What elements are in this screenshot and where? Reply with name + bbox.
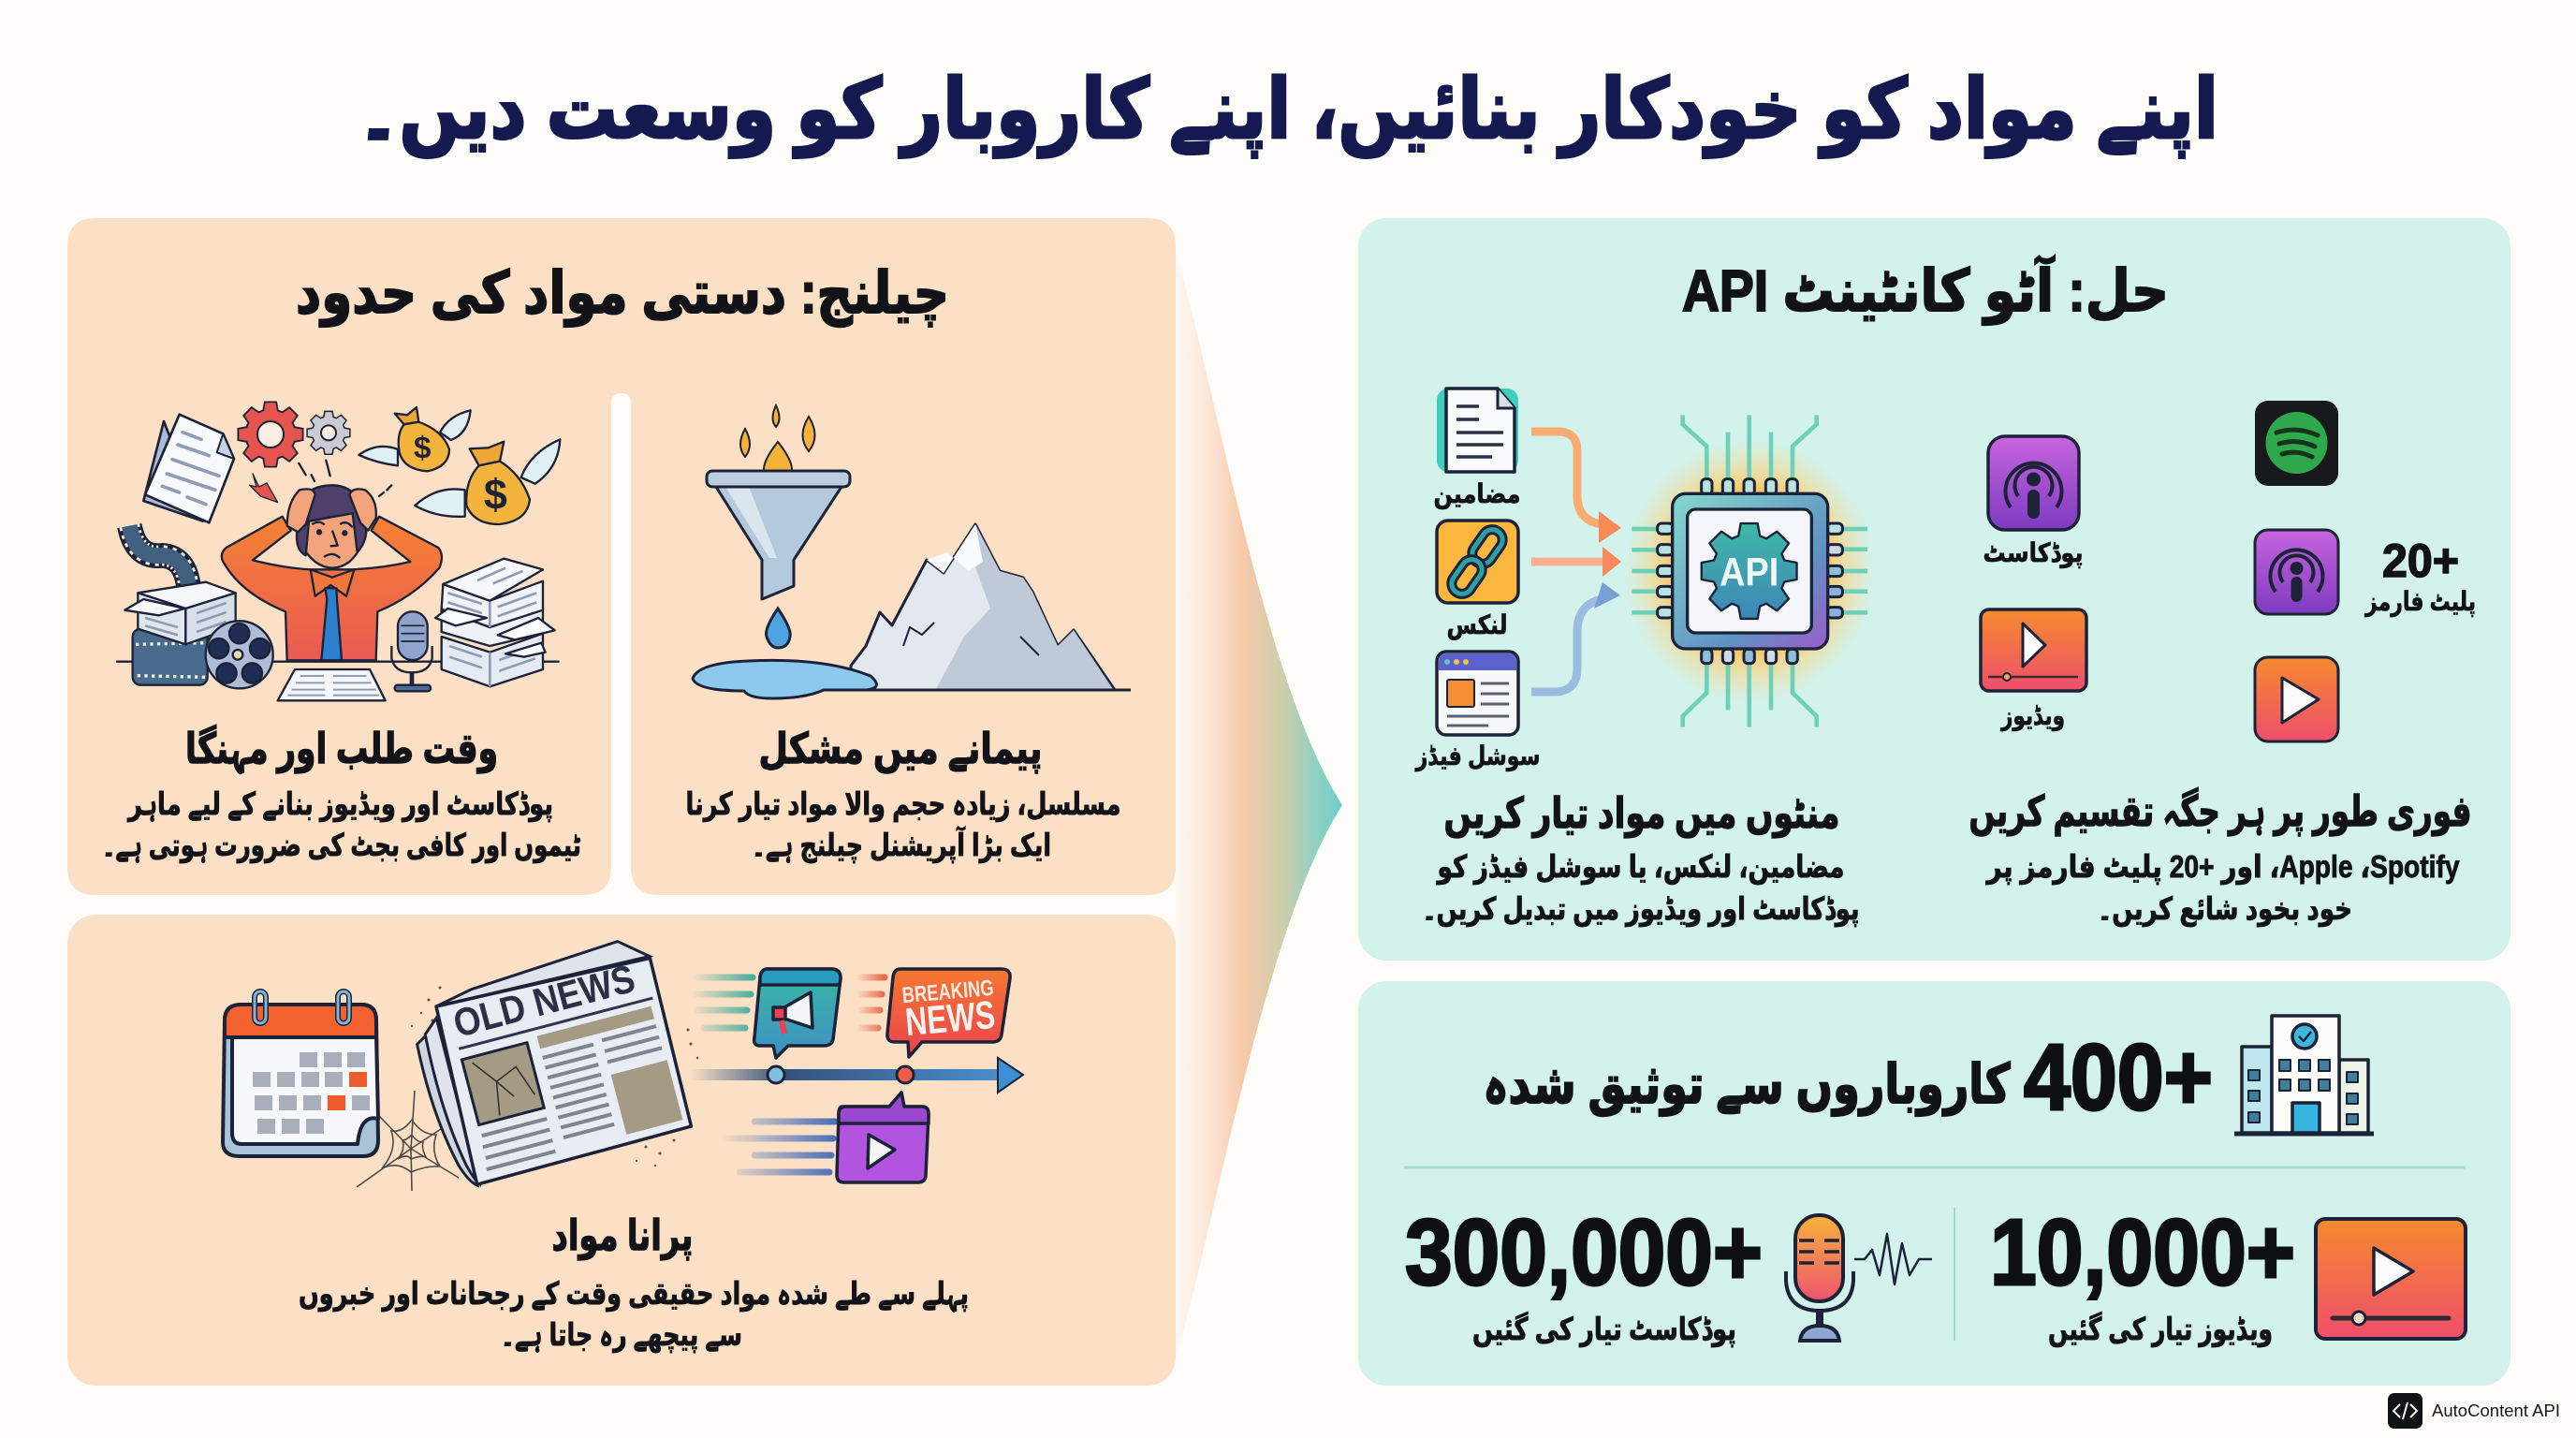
man bbox=[222, 485, 442, 660]
body text: distribute bbox=[1985, 849, 2460, 928]
arrow: transition from challenge to solution bbox=[1176, 253, 1342, 1357]
stat: 20+ platforms: 20+ bbox=[2382, 535, 2459, 587]
icon: apple podcasts bbox=[2255, 530, 2338, 614]
money bags bbox=[359, 407, 560, 524]
cobweb bbox=[357, 1091, 459, 1191]
film reel bbox=[206, 621, 273, 688]
title: اپنے مواد کو خودکار بنائیں، اپنے کاروبار کو وسعت دیں۔ bbox=[358, 63, 2218, 158]
panel: proof stats bbox=[1358, 981, 2510, 1386]
illustration: funnel and mountain bbox=[693, 405, 1131, 698]
stat: 300,000+ podcasts: 300,000+ bbox=[1405, 1200, 1763, 1305]
section: time-consuming and costly bbox=[102, 725, 581, 864]
film and paper stack bbox=[124, 526, 236, 685]
icon: video bbox=[1981, 609, 2086, 691]
gear bbox=[1702, 523, 1797, 619]
icon: spotify bbox=[2255, 401, 2338, 486]
chip API label: API bbox=[1720, 550, 1778, 594]
icon: link bbox=[1437, 521, 1518, 603]
funnel bbox=[707, 471, 850, 599]
ground line bbox=[866, 689, 1131, 691]
label: articles: مضامین bbox=[1434, 479, 1520, 509]
body text: create: مضامین، لنکس، یا سوشل فیڈز کو bbox=[1436, 849, 1844, 886]
panel: solution bbox=[1358, 218, 2510, 961]
illustration: old newspaper bbox=[404, 934, 695, 1191]
subheading: outdated content: پرانا مواد bbox=[552, 1211, 693, 1260]
stat: 10,000+ videos bbox=[1990, 1200, 2295, 1348]
icon: calendar bbox=[223, 991, 378, 1156]
illustration: stressed man at desk bbox=[117, 402, 560, 700]
right paper stack bbox=[435, 559, 555, 686]
label: links: لنکس bbox=[1447, 610, 1507, 640]
body text: outdated content bbox=[299, 1276, 969, 1354]
body text: hard to scale: ایک بڑا آپریشنل چیلنج ہے۔ bbox=[752, 826, 1051, 864]
panel: challenge bbox=[67, 218, 1176, 895]
dollar signs: $ bbox=[414, 431, 432, 465]
body text bbox=[102, 786, 581, 864]
drops bbox=[740, 405, 814, 471]
arrows: inputs to chip bbox=[1531, 432, 1621, 692]
icon: article bbox=[1437, 389, 1518, 472]
breaking news text: NEWS bbox=[903, 992, 997, 1044]
gears bbox=[238, 402, 391, 503]
logo: AutoContent API: AutoContent API bbox=[2432, 1401, 2560, 1420]
label: social feeds: سوشل فیڈز bbox=[1414, 741, 1541, 771]
dust specks bbox=[411, 987, 698, 1167]
label: podcasts: پوڈکاسٹ bbox=[1983, 538, 2084, 568]
icon: breaking news bubble bbox=[887, 969, 1010, 1057]
mountain bbox=[851, 524, 1115, 690]
body text: create: پوڈکاسٹ اور ویڈیوز میں تبدیل کریں۔ bbox=[1423, 891, 1859, 928]
subheading: create content in minutes: منٹوں میں مواد تیار کریں bbox=[1443, 789, 1840, 838]
icon: video bubble bbox=[837, 1093, 929, 1182]
body text: create bbox=[1423, 849, 1859, 928]
icon: podcast bbox=[1988, 436, 2079, 530]
puddle bbox=[693, 660, 876, 698]
body text: پوڈکاسٹ اور ویڈیوز بنانے کے لیے ماہر bbox=[126, 786, 553, 823]
heading: challenge: چیلنج: دستی مواد کی حدود bbox=[296, 261, 949, 327]
stat: 10,000+ videos: 10,000+ bbox=[1990, 1200, 2295, 1305]
body text: ٹیموں اور کافی بجٹ کی ضرورت ہوتی ہے۔ bbox=[102, 828, 581, 864]
desk document bbox=[278, 669, 386, 700]
dollar signs bbox=[414, 431, 507, 518]
document bbox=[143, 415, 234, 522]
label: videos: ویڈیوز bbox=[1999, 701, 2065, 731]
icon: social feeds bbox=[1437, 652, 1518, 735]
speed lines bbox=[691, 977, 885, 1172]
breaking news text bbox=[901, 976, 998, 1044]
stat: 20+ platforms bbox=[2364, 535, 2476, 617]
stat: 400+: 400+ bbox=[2024, 1025, 2213, 1130]
body text: outdated content: پہلے سے طے شدہ مواد حقیقی وقت کے رجحانات اور خبروں bbox=[299, 1276, 969, 1313]
icon: megaphone bubble bbox=[754, 969, 841, 1058]
body text: hard to scale bbox=[685, 786, 1121, 864]
stat: 10,000+ videos: ویڈیوز تیار کی گئیں bbox=[2048, 1311, 2273, 1348]
breaking news text: BREAKING bbox=[901, 976, 995, 1008]
stat: 300,000+ podcasts: پوڈکاسٹ تیار کی گئیں bbox=[1472, 1311, 1736, 1348]
text: verified by businesses: کاروباروں سے توثیق شدہ bbox=[1483, 1054, 2011, 1117]
stat: 20+ platforms: پلیٹ فارمز bbox=[2364, 587, 2476, 617]
panel: outdated content bbox=[67, 915, 1176, 1386]
body text: outdated content: سے پیچھے رہ جاتا ہے۔ bbox=[501, 1317, 742, 1354]
logo: AutoContent API bbox=[2388, 1393, 2560, 1429]
subheading: hard to scale: پیمانے میں مشکل bbox=[758, 725, 1043, 773]
subheading: time-consuming and costly: وقت طلب اور مہنگا bbox=[185, 725, 498, 774]
icon: play bbox=[2255, 657, 2338, 741]
desk line bbox=[117, 658, 559, 665]
timeline arrow bbox=[690, 1058, 1023, 1093]
illustration: API chip bbox=[1625, 415, 1874, 727]
circuit traces bbox=[1632, 415, 1867, 727]
dollar signs: $ bbox=[484, 470, 507, 518]
icon: sound wave bbox=[1854, 1234, 1932, 1284]
water drop bbox=[766, 609, 790, 648]
heading: solution: حل: آٹو کانٹینٹ API bbox=[1682, 255, 2169, 325]
icon: big video bbox=[2316, 1219, 2466, 1339]
icon: microphone bbox=[1786, 1215, 1853, 1341]
body text: distribute: Spotify،‏ Apple،‏ اور ‎20+‎ پلیٹ فارمز پر bbox=[1985, 849, 2460, 886]
microphone bbox=[391, 611, 432, 691]
icon: building bbox=[2234, 1016, 2374, 1134]
body text: hard to scale: مسلسل، زیادہ حجم والا مواد تیار کرنا bbox=[685, 786, 1121, 823]
body text: distribute: خود بخود شائع کریں۔ bbox=[2098, 891, 2352, 928]
newspaper headline: OLD NEWS bbox=[449, 956, 639, 1046]
pins bbox=[1658, 479, 1842, 664]
stat: 300,000+ podcasts bbox=[1405, 1200, 1763, 1348]
